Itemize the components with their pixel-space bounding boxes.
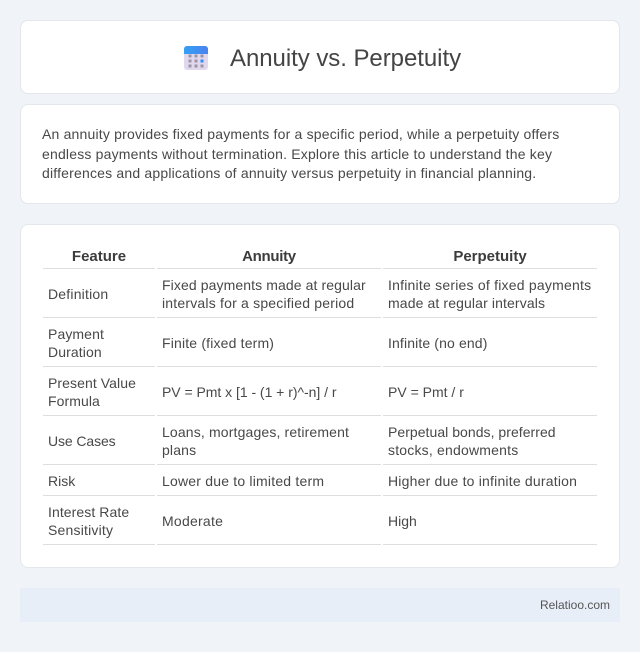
row: payment duration: Finite (fixed term) — [162, 335, 274, 351]
intro text: differences and applications of annuity versus perpetuity in financial planning. — [42, 165, 536, 181]
row: interest rate sensitivity: Moderate — [162, 513, 223, 529]
row: definition: Infinite series of fixed payments — [388, 277, 591, 293]
comparison table panel — [20, 224, 620, 568]
intro text: endless payments without termination. Explore this article to understand the key — [42, 146, 552, 162]
row: payment duration: Payment — [48, 326, 104, 342]
row: use cases: plans — [162, 442, 196, 458]
row: payment duration: Infinite (no end) — [388, 335, 488, 351]
table header: Perpetuity — [453, 248, 527, 265]
row: use cases: Perpetual bonds, preferred — [388, 424, 556, 440]
row: present value formula: PV = Pmt x [1 - (1 + r)^-n] / r — [162, 384, 336, 400]
row: use cases: stocks, endowments — [388, 442, 518, 458]
intro text: An annuity provides fixed payments for a specific period, while a perpetuity offers — [42, 126, 559, 142]
row: present value formula: Formula — [48, 393, 100, 409]
row: definition: Definition — [48, 286, 108, 302]
row: present value formula: PV = Pmt / r — [388, 384, 464, 400]
row: risk: Risk — [48, 473, 75, 489]
row: risk: Lower due to limited term — [162, 473, 324, 489]
row: present value formula: Present Value — [48, 375, 136, 391]
intro panel — [20, 104, 620, 204]
row: present value formula — [43, 375, 597, 416]
title: Annuity vs. Perpetuity — [230, 45, 461, 72]
row: use cases: Use Cases — [48, 433, 116, 449]
row: definition: made at regular intervals — [388, 295, 545, 311]
row: interest rate sensitivity — [43, 504, 597, 545]
footer credit: Relatioo.com — [540, 598, 610, 612]
row: interest rate sensitivity: Interest Rate — [48, 504, 129, 520]
row: definition — [43, 277, 597, 318]
table header: Feature — [72, 248, 126, 265]
row: definition: Fixed payments made at regular — [162, 277, 366, 293]
footer bar — [20, 588, 620, 622]
table header: Annuity — [242, 248, 296, 265]
icon: calendar — [184, 46, 208, 70]
row: definition: intervals for a specified period — [162, 295, 354, 311]
row: payment duration: Duration — [48, 344, 102, 360]
row: interest rate sensitivity: High — [388, 513, 417, 529]
table header — [43, 248, 597, 269]
header panel — [20, 20, 620, 94]
row: use cases: Loans, mortgages, retirement — [162, 424, 349, 440]
row: use cases — [43, 424, 597, 465]
row: risk: Higher due to infinite duration — [388, 473, 577, 489]
intro text — [42, 126, 559, 181]
row: risk — [43, 473, 597, 496]
row: payment duration — [43, 326, 597, 367]
row: interest rate sensitivity: Sensitivity — [48, 522, 113, 538]
